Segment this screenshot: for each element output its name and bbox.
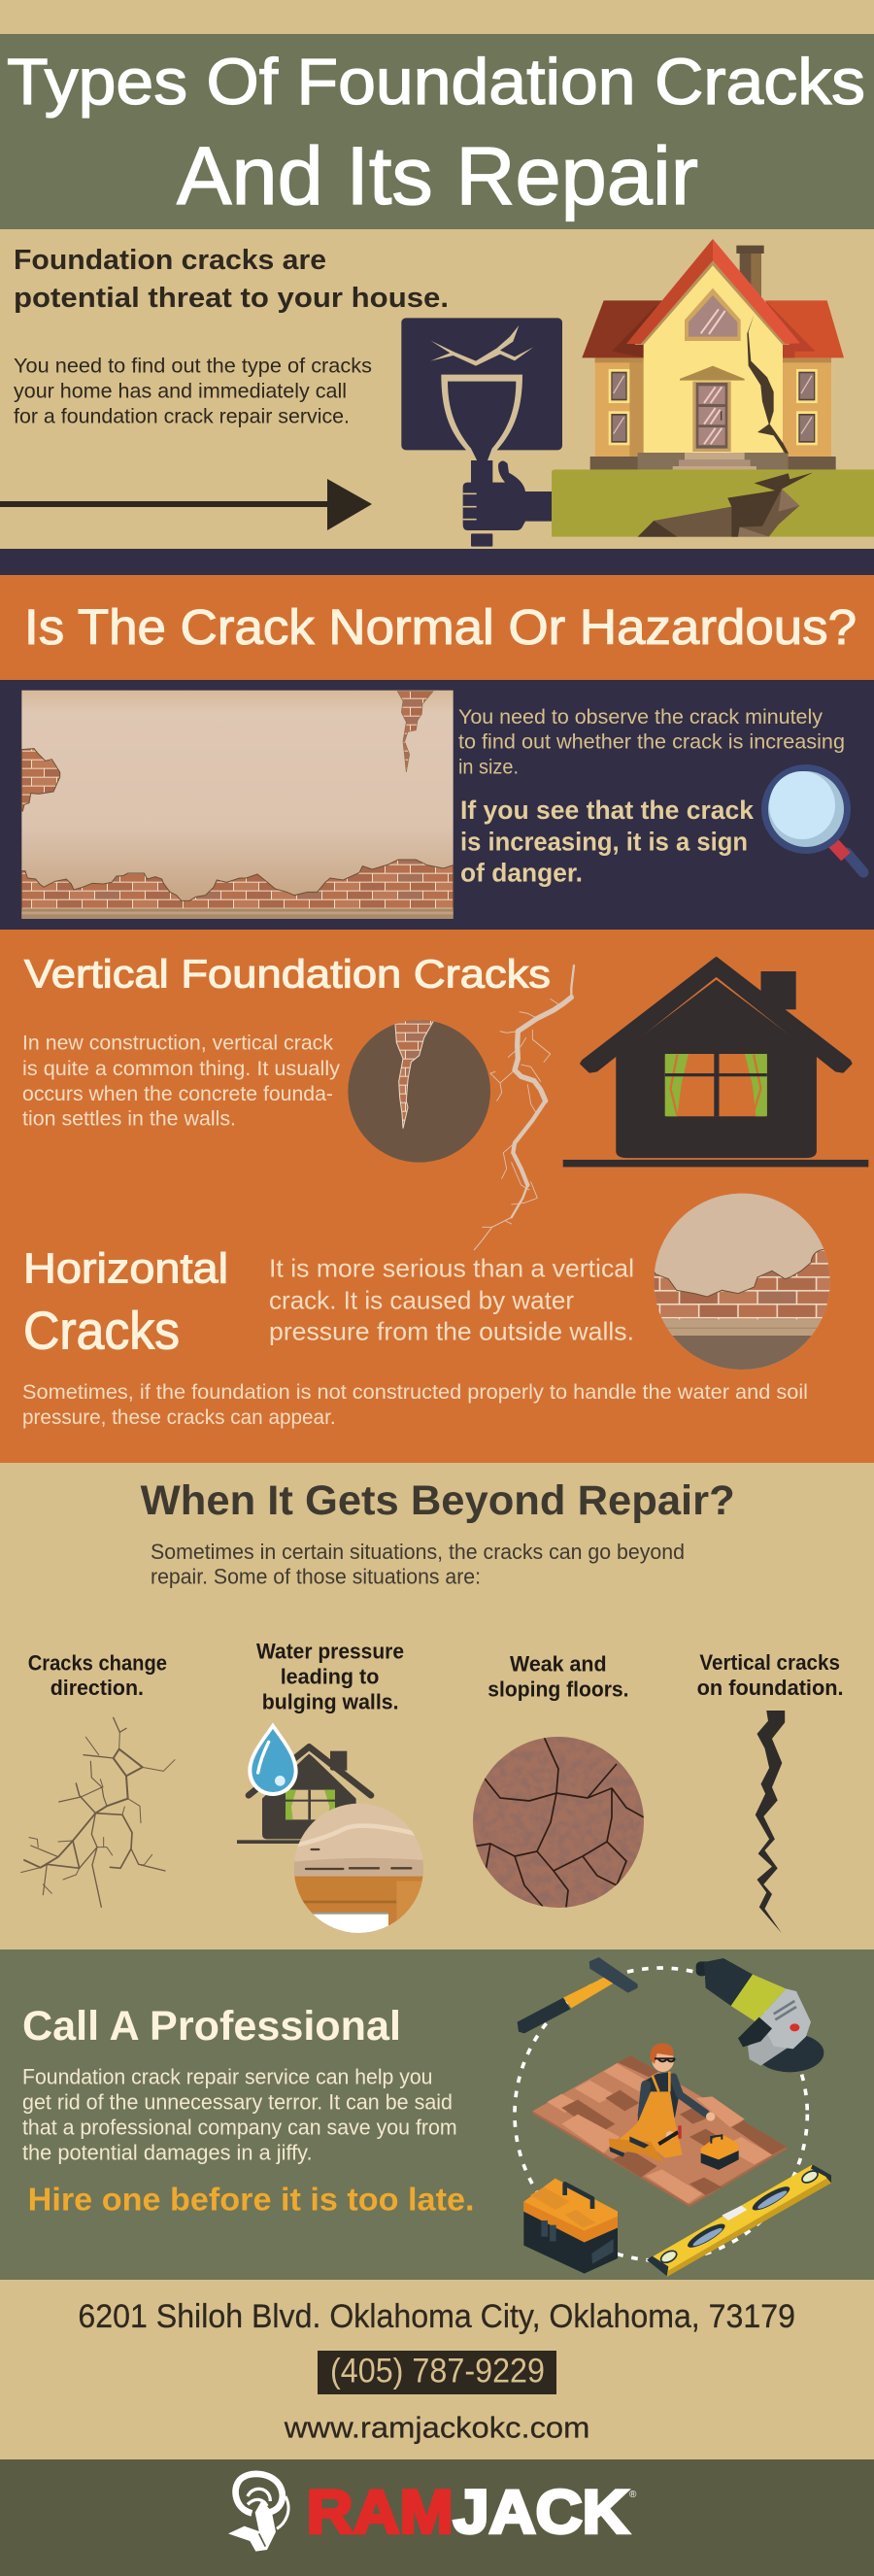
illustration: cracked earth circle: [471, 1735, 646, 1910]
label: water pressure: Water pressure: [256, 1640, 404, 1664]
horizontal crack paragraph: pressure from the outside walls.: [269, 1317, 634, 1346]
side windows: [609, 369, 818, 445]
phone number box: (405) 787-9229: [330, 2352, 545, 2390]
icon: trowel held in fist: [401, 318, 562, 547]
website: www.ramjackokc.com: [284, 2410, 589, 2444]
intro paragraph: your home has and immediately call: [14, 381, 347, 402]
danger callout: is increasing, it is a sign: [460, 828, 748, 857]
title line 2: And Its Repair: [177, 130, 698, 221]
icon: dark house with window: [563, 958, 868, 1167]
paragraph: [151, 1540, 685, 1589]
panel: observe crack: [0, 680, 874, 930]
paragraph: Foundation crack repair service can help you: [22, 2065, 433, 2088]
icon: cracked house on ground: [552, 239, 874, 537]
horizontal crack paragraph: crack. It is caused by water: [269, 1286, 574, 1315]
paragraph: Sometimes in certain situations, the cracks can go beyond: [151, 1540, 685, 1564]
sometimes paragraph: Sometimes, if the foundation is not constructed properly to handle the water and soil: [22, 1381, 808, 1404]
icon: ram head: [228, 2474, 288, 2552]
observe paragraph: in size.: [458, 757, 519, 779]
label: cracks change direction: Cracks change: [28, 1650, 167, 1675]
icon: magnifying glass: [761, 764, 863, 872]
intro heading: [14, 245, 449, 314]
label: water pressure: [256, 1640, 404, 1713]
heading: When It Gets Beyond Repair?: [141, 1477, 735, 1524]
danger callout: of danger.: [460, 859, 583, 888]
observe paragraph: to find out whether the crack is increasing: [458, 731, 845, 754]
label: vertical cracks on foundation: [697, 1650, 844, 1700]
illustration: vertical crack circle: [348, 1019, 490, 1163]
illustration: horizontal crack circle: [651, 1192, 835, 1373]
vertical crack paragraph: [22, 1033, 341, 1131]
gable window: [685, 288, 741, 341]
angle grinder: [696, 1958, 824, 2072]
label: weak and sloping floors: Weak and: [510, 1652, 607, 1677]
label: weak and sloping floors: sloping floors.: [487, 1678, 629, 1702]
panel: title band: [0, 34, 874, 229]
danger callout: [460, 796, 755, 888]
paragraph: that a professional company can save you from: [22, 2116, 457, 2139]
observe paragraph: [458, 706, 845, 779]
large toolbox: [523, 2179, 618, 2274]
intro paragraph: [14, 356, 372, 427]
intro paragraph: for a foundation crack repair service.: [14, 406, 350, 427]
label: cracks change direction: [28, 1650, 167, 1700]
paragraph: [22, 2065, 457, 2164]
label: weak and sloping floors: [487, 1652, 629, 1702]
intro paragraph: You need to find out the type of cracks: [14, 356, 372, 377]
address: 6201 Shiloh Blvd. Oklahoma City, Oklahoma, 73179: [78, 2298, 795, 2335]
heading: horizontal cracks: Cracks: [23, 1301, 180, 1361]
label: vertical cracks on foundation: Vertical cracks: [699, 1650, 840, 1675]
heading: horizontal cracks: [23, 1245, 228, 1361]
window: [665, 1054, 767, 1116]
registered mark: ®: [629, 2490, 637, 2500]
label: cracks change direction: direction.: [50, 1676, 144, 1700]
vertical crack paragraph: occurs when the concrete founda-: [22, 1083, 333, 1105]
paragraph: the potential damages in a jiffy.: [22, 2140, 313, 2164]
danger callout: If you see that the crack: [460, 796, 755, 825]
observe paragraph: You need to observe the crack minutely: [458, 706, 824, 729]
label: vertical cracks on foundation: on foundation.: [697, 1676, 844, 1700]
heading: Call A Professional: [22, 2003, 401, 2050]
wall crack: [747, 314, 789, 454]
heading: horizontal cracks: Horizontal: [23, 1245, 228, 1293]
door: [692, 382, 731, 452]
panel: call a professional: [0, 1949, 874, 2280]
hammer: [518, 1957, 638, 2033]
ground with crack: [552, 469, 874, 537]
panel: is the crack normal heading band: [0, 575, 874, 680]
illustration: worker and tools: [515, 1957, 831, 2277]
illustration: lightning crack: [474, 966, 574, 1250]
water drop: [248, 1722, 298, 1796]
heading: Is The Crack Normal Or Hazardous?: [24, 599, 857, 655]
sometimes paragraph: pressure, these cracks can appear.: [22, 1407, 336, 1429]
logo wordmark: JACK: JACK: [454, 2479, 629, 2547]
worker: [609, 2043, 715, 2163]
arrow: [0, 479, 372, 530]
panel: vertical and horizontal cracks: [0, 930, 874, 1463]
icon: house with water drop and damp wall: [237, 1722, 427, 1935]
strip: navy divider: [0, 549, 874, 575]
intro heading: potential threat to your house.: [14, 283, 449, 314]
illustration: plaster wall with exposed bricks: [21, 691, 454, 919]
damp wall photo: [291, 1802, 427, 1935]
icon: black vertical crack: [756, 1711, 785, 1933]
intro heading: Foundation cracks are: [14, 245, 326, 276]
heading: vertical foundation cracks: Vertical Foundation Cracks: [24, 951, 551, 996]
panel: when it gets beyond repair: [20, 1484, 843, 1933]
logo wordmark: RAM: RAM: [307, 2479, 454, 2547]
panel: contact details: [0, 2280, 874, 2459]
label: water pressure: leading to: [281, 1664, 379, 1688]
paragraph: repair. Some of those situations are:: [151, 1565, 481, 1589]
vertical crack paragraph: In new construction, vertical crack: [22, 1033, 334, 1055]
panel: logo footer: [0, 2459, 874, 2576]
floor tiles: [532, 2055, 787, 2207]
vertical crack paragraph: is quite a common thing. It usually: [22, 1058, 341, 1080]
title line 1: Types Of Foundation Cracks: [7, 46, 865, 119]
vertical crack paragraph: tion settles in the walls.: [22, 1108, 236, 1131]
icon: branching cracks: [21, 1717, 175, 1907]
steps: [673, 453, 756, 473]
panel: intro text: [14, 245, 449, 427]
spirit level: [647, 2164, 831, 2277]
horizontal crack paragraph: It is more serious than a vertical: [269, 1254, 634, 1283]
sometimes paragraph: [22, 1381, 808, 1429]
horizontal crack paragraph: [269, 1254, 634, 1346]
small toolbox: [701, 2134, 739, 2170]
chimney: [736, 246, 764, 298]
callout: hire one: Hire one before it is too late.: [28, 2181, 474, 2217]
label: water pressure: bulging walls.: [262, 1689, 398, 1713]
paragraph: get rid of the unnecessary terror. It can be said: [22, 2089, 453, 2114]
